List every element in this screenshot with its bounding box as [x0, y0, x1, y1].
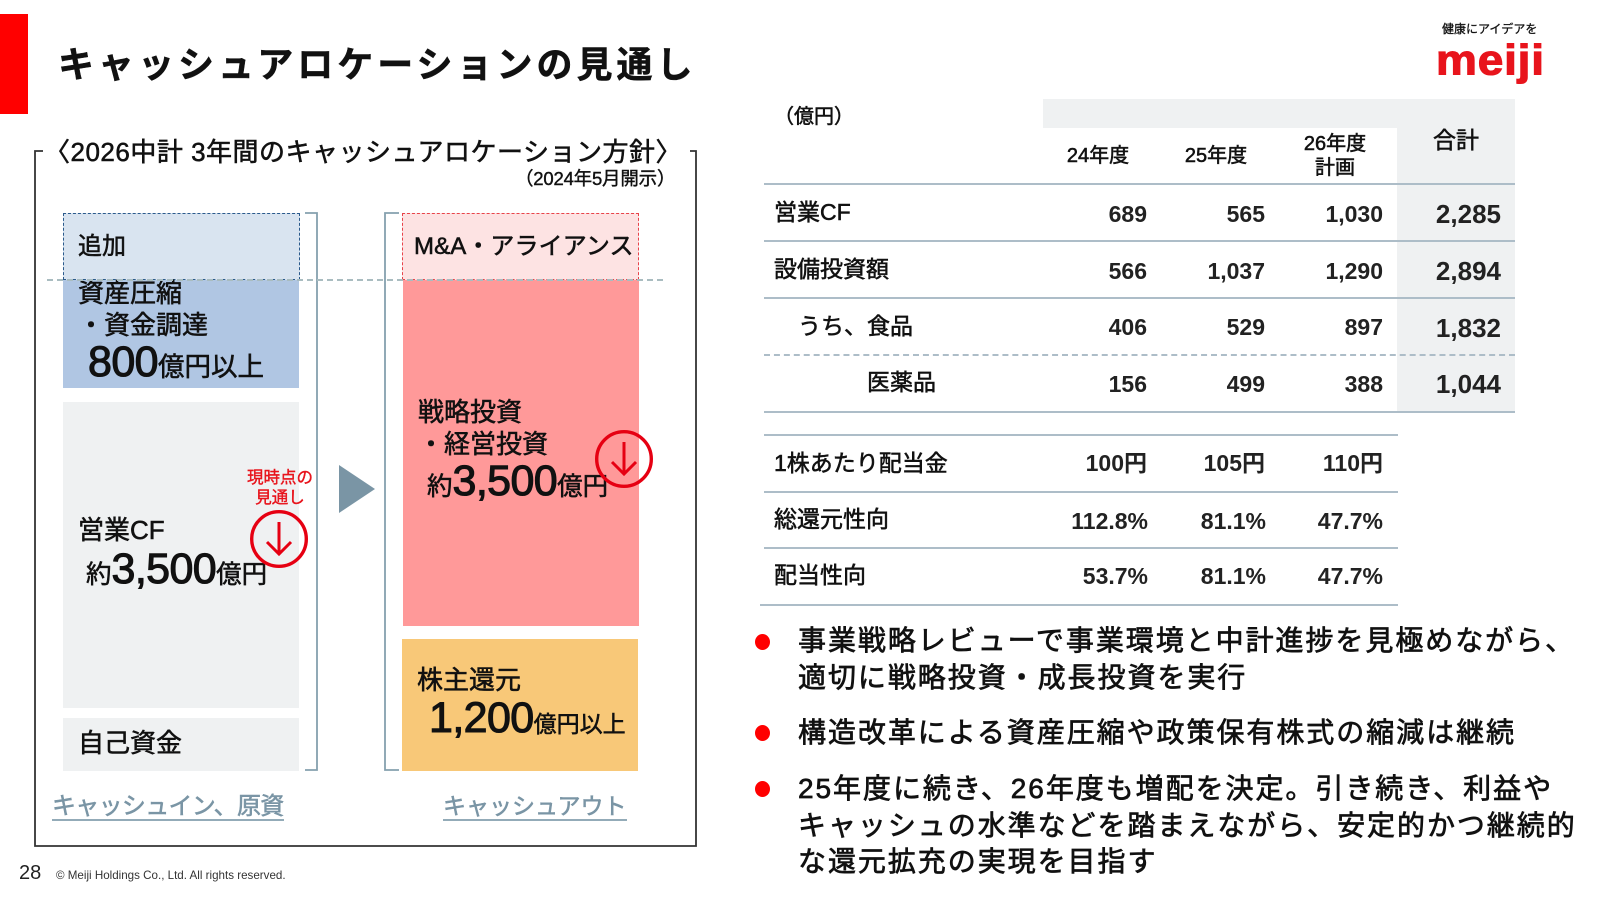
bullet 3 text: 25年度に続き、26年度も増配を決定。引き続き、利益や [798, 773, 1553, 804]
bullet 1 marker [755, 634, 770, 650]
bullet 3 marker [755, 781, 770, 797]
total value: 1,044 [1436, 369, 1501, 399]
table header band [1043, 99, 1515, 128]
FY25 value: 529 [1227, 314, 1265, 340]
unit label: （億円） [774, 106, 854, 128]
box: operating CF [63, 402, 299, 708]
bullet 1 text [798, 625, 1575, 692]
copyright: © Meiji Holdings Co., Ltd. All rights reserved. [56, 869, 286, 882]
bullet list [755, 625, 1577, 877]
panel heading: 〈2026中計 3年間のキャッシュアロケーション方針〉 [44, 137, 682, 167]
label: operating CF: 営業CF [78, 515, 165, 545]
row: pharmaceuticals [867, 369, 1501, 399]
FY24 value: 156 [1109, 371, 1147, 397]
row: total return ratio [774, 506, 1383, 534]
bracket: cash-in [305, 212, 318, 771]
row: capital expenditure [774, 256, 1501, 286]
note: current outlook: 現時点の [247, 469, 313, 487]
page number: 28 [19, 862, 41, 884]
bullet 2 marker [755, 725, 770, 741]
dashed level line [47, 279, 663, 281]
total value: 2,894 [1436, 256, 1501, 286]
FY25 value: 1,037 [1207, 258, 1265, 284]
row label: 営業CF [774, 199, 851, 225]
FY26 value: 388 [1345, 371, 1383, 397]
arrow: cash-in to cash-out [339, 465, 375, 513]
FY24 value: 406 [1109, 314, 1147, 340]
row: dividend per share [774, 450, 1383, 476]
row label: うち、食品 [798, 313, 913, 339]
box: additional [63, 213, 300, 280]
bullet 1 text: 適切に戦略投資・成長投資を実行 [798, 662, 1247, 692]
bullet 3 text [798, 773, 1577, 877]
row label: 設備投資額 [774, 256, 889, 282]
row label: 配当性向 [774, 562, 866, 588]
FY24 value: 53.7% [1083, 563, 1148, 589]
row label: 総還元性向 [774, 506, 889, 532]
label: additional: 追加 [78, 233, 126, 260]
panel frame [34, 150, 697, 847]
FY25 value: 81.1% [1201, 508, 1266, 534]
total value: 2,285 [1436, 199, 1501, 229]
FY24 value: 112.8% [1071, 508, 1148, 534]
value: shareholder returns: 1,200億円以上 [429, 694, 626, 742]
disclosure note: （2024年5月開示） [515, 168, 675, 189]
box: own funds [63, 718, 299, 771]
header: total: 合計 [1433, 127, 1479, 153]
label: asset reduction: 資産圧縮 [78, 278, 182, 308]
FY24 value: 566 [1109, 258, 1147, 284]
note: current outlook: 見通し [255, 489, 305, 507]
caption: cash-in: キャッシュイン、原資 [52, 793, 284, 820]
bracket: cash-out [384, 212, 399, 771]
table: financial figures [760, 99, 1515, 606]
row label: 1株あたり配当金 [774, 450, 948, 476]
logo: meiji [1436, 22, 1545, 84]
box: strategic investment [403, 280, 639, 626]
bullet 1 text: 事業戦略レビューで事業環境と中計進捗を見極めながら、 [798, 625, 1575, 656]
box: M&A and alliances [402, 213, 639, 280]
header: FY24: 24年度 [1067, 145, 1129, 167]
value: operating CF: 約3,500億円 [86, 545, 267, 593]
red accent bar [0, 14, 28, 114]
total value: 1,832 [1436, 313, 1501, 343]
value: strategic investment: 約3,500億円 [427, 457, 608, 505]
row: operating CF [774, 199, 1501, 229]
header: FY26 plan [1304, 132, 1366, 179]
label: ordinary investment: ・経営投資 [418, 429, 548, 459]
label: financing: ・資金調達 [78, 310, 208, 340]
bullet 2 text: 構造改革による資産圧縮や政策保有株式の縮減は継続 [798, 717, 1516, 748]
box: asset reduction and financing [63, 280, 299, 388]
icon: down arrow right [595, 430, 653, 488]
FY24 value: 100円 [1086, 450, 1147, 476]
header: FY26 plan: 計画 [1315, 157, 1355, 179]
row: food [798, 313, 1501, 343]
FY25 value: 105円 [1204, 450, 1265, 476]
logo wordmark: meiji [1436, 35, 1545, 84]
FY25 value: 565 [1227, 201, 1265, 227]
FY26 value: 897 [1345, 314, 1383, 340]
FY26 value: 1,290 [1325, 258, 1383, 284]
FY26 value: 110円 [1323, 450, 1383, 476]
label: shareholder returns: 株主還元 [417, 665, 521, 695]
panel: 2026 cash allocation policy [34, 137, 697, 847]
FY25 value: 499 [1227, 371, 1265, 397]
label: own funds: 自己資金 [78, 728, 182, 758]
FY26 value: 1,030 [1325, 201, 1383, 227]
box: shareholder returns [402, 639, 638, 771]
FY24 value: 689 [1109, 201, 1147, 227]
FY25 value: 81.1% [1201, 563, 1266, 589]
label: M&A and alliances: M&A・アライアンス [414, 233, 634, 260]
value: 800: 800億円以上 [88, 338, 264, 386]
title: キャッシュアロケーションの見通し [58, 44, 697, 85]
header: FY26 plan: 26年度 [1304, 133, 1366, 155]
FY26 value: 47.7% [1318, 563, 1383, 589]
FY26 value: 47.7% [1318, 508, 1383, 534]
logo tagline: 健康にアイデアを [1442, 22, 1537, 36]
row: payout ratio [774, 562, 1383, 589]
header: FY25: 25年度 [1185, 145, 1247, 167]
note: current outlook [247, 468, 313, 507]
caption: cash-out: キャッシュアウト [443, 793, 627, 819]
bullet 3 text: キャッシュの水準などを踏まえながら、安定的かつ継続的 [798, 810, 1577, 840]
row label: 医薬品 [867, 369, 936, 395]
bullet 3 text: な還元拡充の実現を目指す [798, 846, 1157, 877]
total column shade [1397, 128, 1515, 412]
icon: down arrow left [250, 510, 308, 568]
label: strategic investment: 戦略投資 [418, 397, 522, 427]
